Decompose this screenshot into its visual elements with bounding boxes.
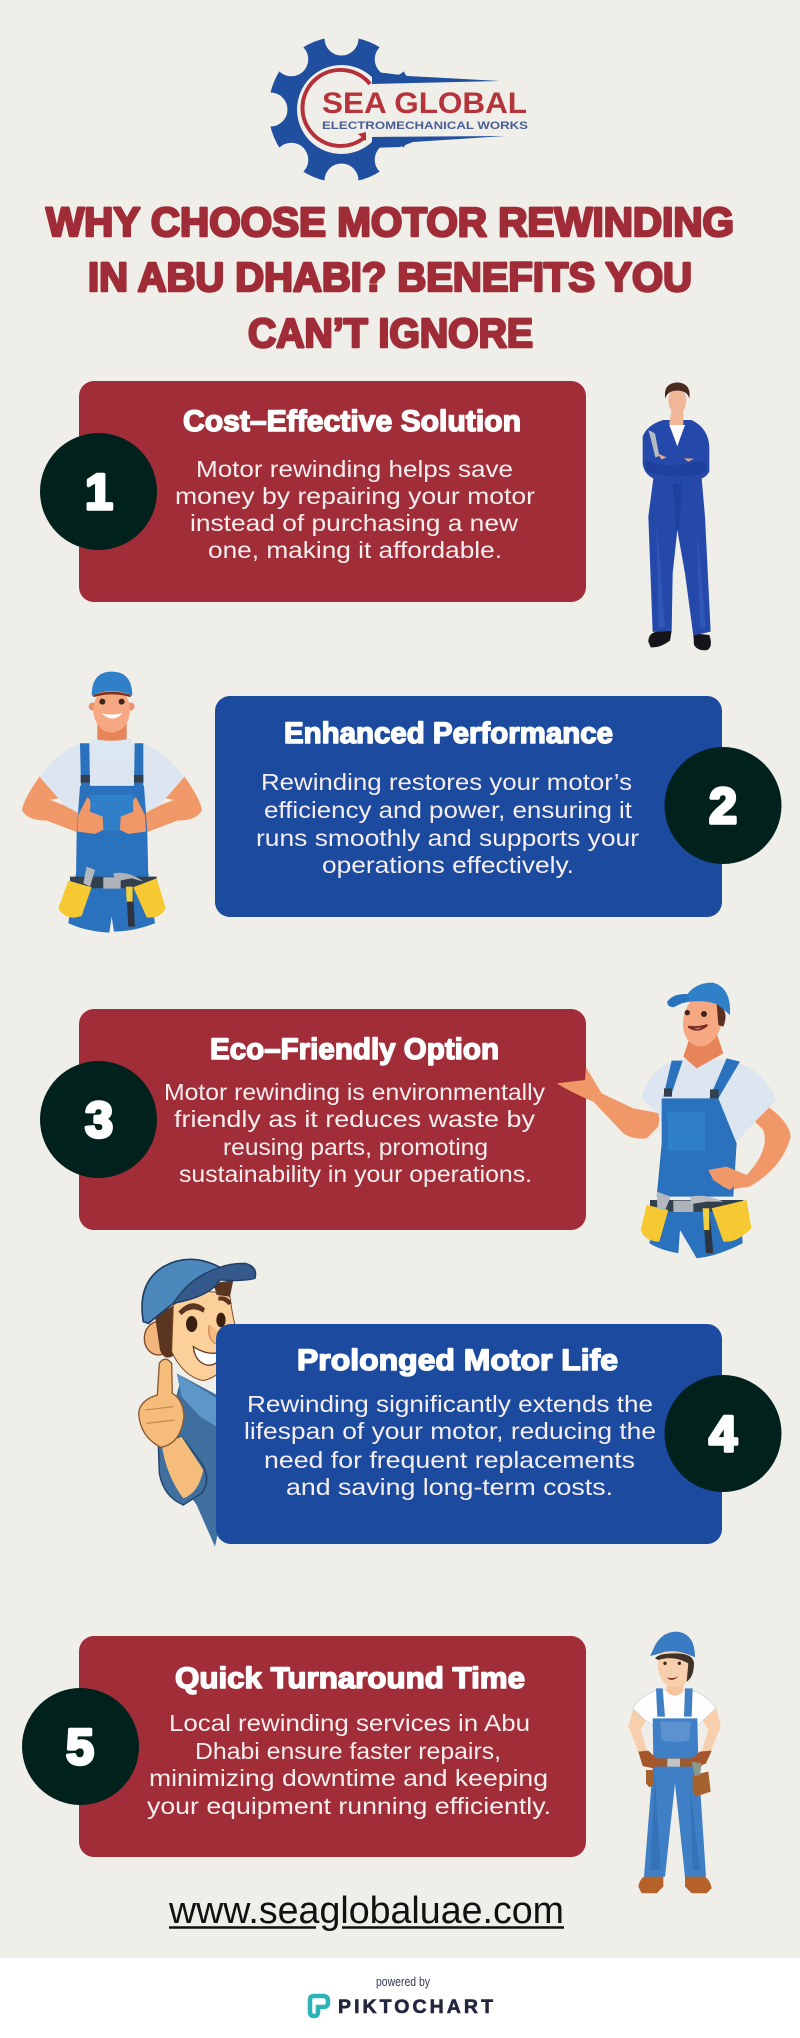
text block: quick turnaround time: Local rewinding services in Abu	[169, 1710, 530, 1736]
number badge 4: 4	[709, 1406, 737, 1462]
heading: quick turnaround time: Quick Turnaround Time	[175, 1662, 525, 1695]
number badge 1	[40, 433, 157, 550]
title: WHY CHOOSE MOTOR REWINDING	[46, 199, 734, 245]
footer: powered by Piktochart: PIKTOCHART	[338, 1996, 493, 2018]
text block: eco-friendly option	[164, 1079, 546, 1187]
text block: prolonged motor life: need for frequent replacements	[264, 1447, 635, 1473]
heading: prolonged motor life: Prolonged Motor Life	[297, 1344, 618, 1377]
text block: cost-effective solution: instead of purchasing a new	[190, 510, 518, 536]
text block: enhanced performance: runs smoothly and supports your	[256, 825, 639, 851]
number badge 3: 3	[85, 1092, 113, 1148]
text block: prolonged motor life: and saving long-term costs.	[286, 1474, 613, 1500]
text block: eco-friendly option: reusing parts, promoting	[223, 1134, 488, 1160]
icon: Piktochart logo	[310, 1996, 328, 2016]
text block: enhanced performance	[256, 769, 639, 878]
text block: enhanced performance: efficiency and power, ensuring it	[264, 797, 633, 823]
number badge 2	[664, 747, 782, 864]
logo: Sea Global gear: ELECTROMECHANICAL WORKS	[322, 120, 528, 132]
panel: eco-friendly option	[79, 1009, 586, 1230]
text block: prolonged motor life	[244, 1391, 656, 1500]
title	[46, 199, 734, 356]
footer: powered by Piktochart	[0, 1958, 800, 2038]
text block: prolonged motor life: lifespan of your motor, reducing the	[244, 1418, 656, 1444]
panel: enhanced performance	[215, 696, 722, 917]
text block: cost-effective solution	[175, 456, 535, 563]
text block: quick turnaround time: Dhabi ensure faster repairs,	[195, 1738, 501, 1764]
panel: quick turnaround time	[79, 1636, 586, 1857]
icon: mechanic in blue coverall	[643, 382, 711, 650]
title: IN ABU DHABI? BENEFITS YOU	[88, 254, 692, 300]
icon: cartoon mechanic peeking	[139, 1259, 256, 1547]
number badge 5	[22, 1688, 139, 1805]
text block: cost-effective solution: Motor rewinding helps save	[196, 456, 513, 482]
text block: enhanced performance: Rewinding restores your motor’s	[261, 769, 632, 795]
text block: quick turnaround time: your equipment running efficiently.	[147, 1793, 551, 1819]
text block: enhanced performance: operations effectively.	[322, 852, 574, 878]
heading: eco-friendly option: Eco–Friendly Option	[210, 1033, 499, 1066]
icon: mechanic in overalls with gloves	[628, 1632, 721, 1893]
panel: prolonged motor life	[216, 1324, 722, 1544]
logo: Sea Global gear: SEA GLOBAL	[322, 87, 527, 120]
number badge 5: 5	[66, 1719, 94, 1775]
panel: cost-effective solution	[79, 381, 586, 602]
number badge 3	[40, 1061, 157, 1178]
text block: cost-effective solution: one, making it affordable.	[208, 537, 502, 563]
heading: enhanced performance: Enhanced Performance	[284, 717, 613, 750]
text block: eco-friendly option: sustainability in your operations.	[179, 1161, 532, 1187]
website link: www.seaglobaluae.com	[168, 1890, 564, 1932]
footer: powered by Piktochart: powered by	[376, 1975, 431, 1989]
text block: cost-effective solution: money by repairing your motor	[175, 483, 535, 509]
logo: Sea Global gear	[254, 22, 536, 198]
icon: mechanic presenting	[557, 983, 791, 1258]
title: CAN’T IGNORE	[248, 310, 533, 356]
text block: quick turnaround time	[147, 1710, 551, 1819]
heading: cost-effective solution: Cost–Effective Solution	[183, 405, 521, 438]
number badge 2: 2	[709, 778, 737, 834]
icon: mechanic thumbs up	[22, 672, 202, 933]
text block: prolonged motor life: Rewinding significantly extends the	[247, 1391, 653, 1417]
text block: eco-friendly option: Motor rewinding is environmentally	[164, 1079, 546, 1105]
text block: quick turnaround time: minimizing downtime and keeping	[149, 1765, 548, 1791]
number badge 1: 1	[85, 464, 113, 520]
text block: eco-friendly option: friendly as it reduces waste by	[174, 1106, 536, 1132]
number badge 4	[664, 1375, 782, 1492]
